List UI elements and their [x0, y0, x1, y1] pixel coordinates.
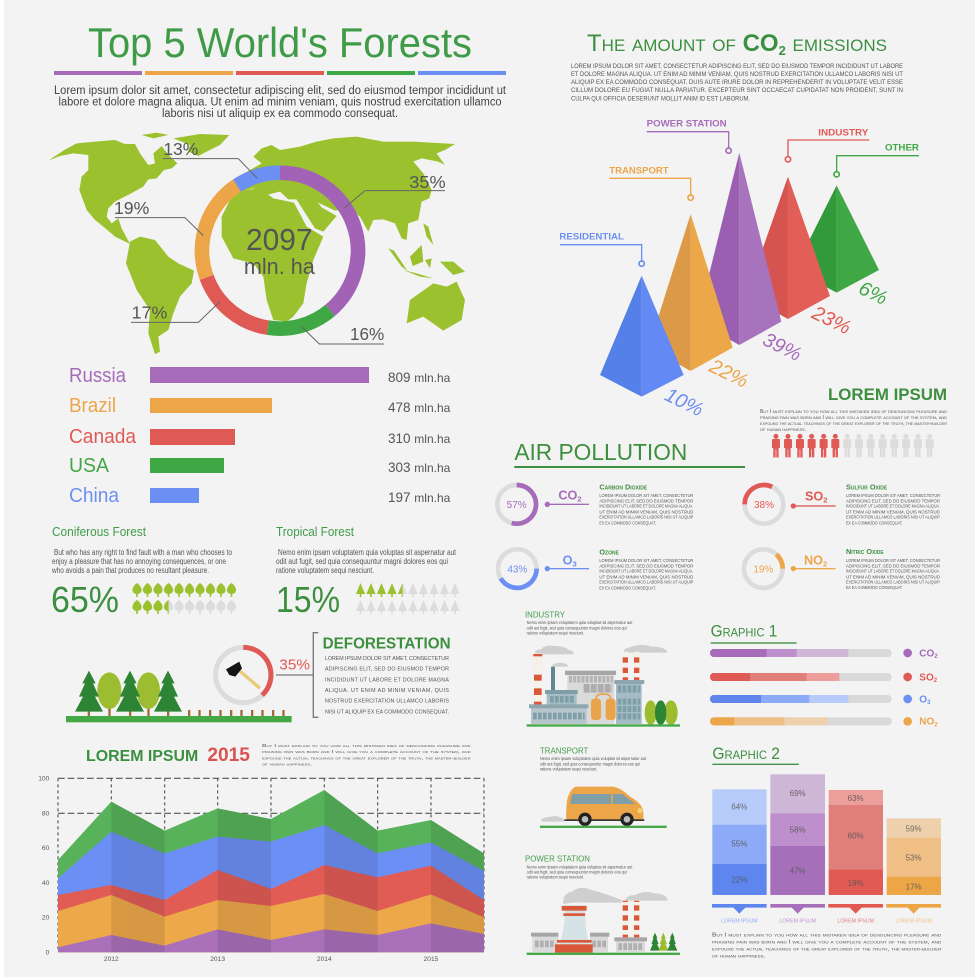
- text: ozone: LOREM IPSUM DOLOR SIT AMET, CONSECTETUR: [599, 558, 694, 564]
- text: sulfur oxide: [846, 482, 940, 527]
- text: ozone: ADIPISCING ELIT, SED DO EIUSMOD TEMPOR: [599, 563, 694, 569]
- gauge: NO2: [744, 549, 836, 588]
- legend: CO: [919, 648, 934, 659]
- CO2 intro text: [571, 64, 903, 102]
- column values: 58%: [790, 825, 806, 834]
- power station heading and text: odit aut fugit, sed quia consequuntur magni dolores eos qui: [527, 870, 627, 876]
- bar chart: top 5 countries: [69, 365, 451, 507]
- panel: tropical forest: [276, 525, 460, 620]
- world map with donut chart: 13%: [163, 139, 198, 159]
- panel: coniferous forest: But who has any right to find fault with a man who chooses to: [54, 548, 233, 557]
- connector and bracket: [276, 633, 318, 717]
- icon: conifer pictogram row: [356, 583, 460, 614]
- panel: tropical forest: Tropical Forest: [276, 525, 354, 539]
- axis labels: 2013: [210, 956, 225, 963]
- column captions: LOREM IPSUM: [721, 918, 758, 924]
- callout: power station: [647, 119, 731, 153]
- icon: tree pictogram row: [132, 583, 236, 614]
- bar chart: top 5 countries: Brazil: [69, 395, 116, 417]
- text: carbon dioxide: Carbon Dioxide: [599, 482, 648, 491]
- text: nitric oxide: Nitric Oxide: [846, 547, 884, 556]
- graphic 2 text: But I must explain to you how all this mistaken idea of denouncing pleasure and: [712, 933, 941, 939]
- bar chart: top 5 countries: 197 mln.ha: [388, 490, 451, 505]
- callout: power station: POWER STATION: [647, 119, 727, 129]
- text: ozone: [599, 548, 694, 592]
- text: nitric oxide: UT ENIM AD MINIM VENIAM, QUIS NOSTRUD: [846, 574, 940, 580]
- world map with donut chart: 17%: [132, 302, 167, 322]
- industry heading and text: ratione voluptatem sequi nesciunt.: [527, 631, 584, 637]
- legend: NO: [919, 717, 934, 728]
- title: Top 5 World's Forests: [88, 19, 472, 66]
- pyramid: power station: [697, 153, 781, 345]
- panel: area chart 2015: [38, 743, 484, 963]
- CO2 intro text: ET DOLORE MAGNA ALIQUA. UT ENIM AD MINIM VENIAM, QUIS NOSTRUD EXERCITATION ULLAMCO LABORIS NISI UT: [571, 72, 903, 78]
- panel: lorem ipsum people: expound the actual teachings of the great explorer of the truth, the master-builder: [760, 421, 947, 427]
- deforestation text: NISI UT ALIQUIP EX EA COMMODO CONSEQUAT.: [325, 709, 449, 715]
- column captions: [721, 918, 932, 924]
- column values: 60%: [848, 832, 864, 841]
- pyramid: residential: [600, 276, 684, 397]
- column captions: LOREM IPSUM: [837, 918, 874, 924]
- panel: graphic 2: [712, 744, 941, 960]
- transport heading and text: [540, 745, 647, 773]
- gauge: O3: [498, 549, 589, 588]
- text: ozone: Ozone: [599, 548, 620, 557]
- pyramid: industry: [746, 177, 830, 319]
- deforestation text: LOREM IPSUM DOLOR SIT AMET, CONSECTETUR: [325, 656, 449, 662]
- tree stumps: [188, 710, 285, 716]
- stacked area layers: [58, 790, 484, 952]
- panel: tropical forest: odit aut fugit, sed quia consequuntur magni dolores eos qui: [276, 557, 448, 566]
- text: ozone: UT ENIM AD MINIM VENIAM, QUIS NOSTRUD: [599, 574, 694, 580]
- column values: 47%: [790, 867, 806, 876]
- heading: CO2 emissions: 2: [779, 43, 786, 58]
- donut centre value: 2097: [246, 223, 313, 257]
- world map with donut chart: 35%: [409, 172, 446, 192]
- deforestation text: NOSTRUD EXERCITATION ULLAMCO LABORIS: [325, 699, 449, 705]
- text: carbon dioxide: INCIDIDUNT UT LABORE ET DOLORE MAGNA ALIQUA.: [599, 504, 693, 510]
- donut centre value: mln. ha: [244, 254, 316, 279]
- deforestation text: ALIQUA. UT ENIM AD MINIM VENIAM, QUIS: [325, 688, 449, 694]
- industry heading and text: Nemo enim ipsam voluptatem quia voluptas sit aspernatur aut: [527, 620, 633, 626]
- power station heading and text: POWER STATION: [525, 853, 590, 863]
- transport heading and text: odit aut fugit, sed quia consequuntur magni dolores eos qui: [540, 761, 640, 767]
- callout: other: OTHER: [885, 143, 920, 153]
- deforestation heading: DEFORESTATION: [323, 635, 451, 652]
- text: nitric oxide: EXERCITATION ULLAMCO LABORIS NISI UT ALIQUIP: [846, 580, 940, 586]
- axis labels: 100: [38, 776, 50, 783]
- text: nitric oxide: EX EA COMMODO CONSEQUAT.: [846, 585, 903, 591]
- gauge: SO2: 2: [823, 496, 828, 505]
- panel: pollution sources: [525, 609, 680, 955]
- text: carbon dioxide: UT ENIM AD MINIM VENIAM, QUIS NOSTRUD: [599, 509, 694, 515]
- donut centre value: [244, 223, 316, 279]
- pyramid percentages: 39%: [759, 329, 805, 366]
- intro text: Lorem ipsum dolor sit amet, consectetur adipiscing elit, sed do eiusmod tempor incididunt ut: [54, 85, 507, 97]
- panel: tropical forest: 15%: [276, 579, 340, 620]
- illustration: power station: [527, 888, 680, 955]
- panel: tropical forest: Nemo enim ipsam voluptatem quia voluptas sit aspernatur aut: [278, 548, 457, 557]
- intro text: laboris nisi ut aliquip ex ea commodo consequat.: [162, 108, 398, 120]
- axis labels: 0: [46, 950, 50, 957]
- panel: deforestation: [66, 633, 451, 722]
- text: sulfur oxide: LOREM IPSUM DOLOR SIT AMET, CONSECTETUR: [846, 493, 940, 499]
- text: ozone: EXERCITATION ULLAMCO LABORIS NISI UT ALIQUIP: [599, 580, 693, 586]
- panel: coniferous forest: [51, 525, 236, 620]
- deforestation text: [325, 656, 449, 715]
- CO2 intro text: CULPA QUI OFFICIA DESERUNT MOLLIT ANIM ID EST LABORUM.: [571, 96, 750, 102]
- chart description: expound the actual teachings of the great explorer of the truth, the master-builder: [262, 755, 472, 761]
- text: carbon dioxide: EXERCITATION ULLAMCO LABORIS NISI UT ALIQUIP: [599, 515, 693, 521]
- bar chart: top 5 countries: 478 mln.ha: [388, 400, 451, 415]
- donut leader lines and percentages: [115, 159, 445, 344]
- transport heading and text: ratione voluptatem sequi nesciunt.: [540, 767, 597, 773]
- legend: 2: [934, 722, 938, 728]
- column values: 19%: [848, 879, 864, 888]
- text: nitric oxide: ADIPISCING ELIT, SED DO EIUSMOD TEMPOR: [846, 563, 940, 569]
- panel: coniferous forest: Coniferous Forest: [52, 525, 146, 539]
- gauge with axe icon: [216, 647, 271, 703]
- bar chart: top 5 countries: 310 mln.ha: [388, 431, 451, 446]
- illustration: van: [540, 787, 667, 828]
- panel: lorem ipsum people: praising pain was born and I will give you a complete account of the system, and: [760, 415, 947, 421]
- column captions: LOREM IPSUM: [779, 918, 816, 924]
- text: sulfur oxide: Sulfur Oxide: [846, 482, 888, 491]
- title colour rule: [54, 71, 506, 75]
- column values: 64%: [731, 803, 747, 812]
- industry heading and text: odit aut fugit, sed quia consequuntur magni dolores eos qui: [527, 625, 627, 631]
- graphic 1 heading: Graphic 1: [711, 622, 777, 641]
- axis labels: 2012: [104, 956, 119, 963]
- pyramid percentages: 23%: [808, 302, 854, 339]
- chart description: praising pain was born and I will give you a complete account of the system, and: [262, 749, 472, 755]
- panel: graphic 1: [710, 622, 938, 728]
- callout: industry: [785, 127, 869, 162]
- column captions: LOREM IPSUM: [895, 918, 932, 924]
- column values: 53%: [906, 854, 922, 863]
- legend: [903, 648, 938, 728]
- legend: O: [919, 694, 927, 705]
- text: sulfur oxide: EXERCITATION ULLAMCO LABORIS NISI UT ALIQUIP: [846, 515, 940, 521]
- column values: 59%: [906, 825, 922, 834]
- world map with donut chart: 19%: [114, 198, 149, 218]
- callout: other: [834, 143, 920, 177]
- gauge: O3: O: [563, 553, 573, 567]
- chart heading: LOREM IPSUM: [86, 748, 198, 765]
- gauge: CO2: 2: [577, 494, 582, 503]
- pyramid percentages: [661, 277, 891, 421]
- chart description: But I must explain to you how all this mistaken idea of denouncing pleasure and: [262, 743, 472, 749]
- trees: [75, 671, 182, 716]
- air pollution heading: AIR POLLUTION: [514, 439, 687, 465]
- panel: coniferous forest: 65%: [51, 579, 119, 620]
- column values: 55%: [731, 839, 747, 848]
- text: sulfur oxide: UT ENIM AD MINIM VENIAM, QUIS NOSTRUD: [846, 509, 940, 515]
- world map with donut chart: 16%: [350, 324, 384, 344]
- pyramid percentages: 10%: [661, 384, 707, 421]
- pyramid chart: [559, 119, 920, 421]
- progress bars: [710, 649, 892, 725]
- chart description: of human happiness.: [262, 762, 312, 768]
- bar chart: top 5 countries: Russia: [69, 365, 127, 387]
- callout: transport: [609, 165, 693, 200]
- gauge: NO2: 19%: [753, 564, 773, 575]
- map: continents: [48, 133, 465, 354]
- icon: people pictogram: [772, 434, 934, 457]
- axis labels: 20: [42, 915, 50, 922]
- panel: lorem ipsum people: LOREM IPSUM: [828, 386, 947, 404]
- panel: lorem ipsum people: [760, 386, 947, 457]
- deforestation text: ADIPISCING ELIT, SED DO EIUSMOD TEMPOR: [325, 667, 449, 673]
- panel: lorem ipsum people: But I must explain to you how all this mistaken idea of denouncing pleasure and: [760, 409, 947, 415]
- legend: 2: [934, 654, 938, 660]
- panel: coniferous forest: enjoy a pleasure that has no annoying consequences, or one: [52, 557, 226, 566]
- transport heading and text: Nemo enim ipsam voluptatem quia voluptas sit aspernatur aut: [540, 756, 647, 762]
- bar chart: top 5 countries: Canada: [69, 426, 137, 448]
- heading: CO2 emissions: emissions: [786, 30, 887, 57]
- chart description: [262, 743, 472, 768]
- axis labels: 2014: [317, 956, 332, 963]
- callout: residential: RESIDENTIAL: [559, 231, 625, 241]
- legend: 2: [934, 678, 938, 684]
- gauge: CO2: [497, 485, 589, 524]
- donut ring segments: [202, 173, 358, 329]
- callout: industry: INDUSTRY: [818, 127, 868, 137]
- bar chart: top 5 countries: 303 mln.ha: [388, 460, 451, 475]
- text: carbon dioxide: ADIPISCING ELIT, SED DO EIUSMOD TEMPOR: [599, 498, 694, 504]
- gauge: CO2: 57%: [507, 500, 527, 511]
- heading: CO2 emissions: The amount of CO: [587, 30, 779, 57]
- gauge: SO2: [745, 485, 836, 524]
- heading underline: [514, 466, 745, 468]
- text: carbon dioxide: EX EA COMMODO CONSEQUAT.: [599, 521, 656, 527]
- bar chart: top 5 countries: 809 mln.ha: [388, 370, 451, 385]
- world map with donut chart: [48, 133, 465, 354]
- callout: transport: TRANSPORT: [609, 165, 669, 175]
- callout: residential: [559, 231, 644, 266]
- ground: [66, 716, 292, 722]
- air pollution panel: [497, 439, 940, 592]
- industry heading and text: INDUSTRY: [525, 609, 565, 619]
- deforestation percentage: 35%: [279, 656, 310, 673]
- intro text: [54, 85, 507, 120]
- column values: 63%: [848, 794, 864, 803]
- gauge: SO2: SO: [805, 490, 823, 504]
- axis labels: 60: [42, 845, 50, 852]
- illustration: factory: [527, 645, 680, 727]
- axis labels: 80: [42, 811, 50, 818]
- panel: tropical forest: ratione voluptatem sequi nesciunt.: [276, 566, 374, 575]
- pyramid: transport: [649, 214, 733, 371]
- bar chart: top 5 countries: China: [69, 485, 120, 507]
- column values: [731, 789, 922, 891]
- legend: SO: [919, 672, 934, 683]
- graphic 2 text: praising pain was born and I will give you a complete account of the system, and: [712, 940, 941, 946]
- text: carbon dioxide: [599, 482, 694, 527]
- power station heading and text: ratione voluptatem sequi nesciunt.: [527, 875, 584, 881]
- text: sulfur oxide: ADIPISCING ELIT, SED DO EIUSMOD TEMPOR: [846, 498, 940, 504]
- gauge: O3: 43%: [507, 564, 527, 575]
- graphic 2 text: expound the actual teachings of the great explorer of the truth, the master-builder: [712, 946, 941, 952]
- text: sulfur oxide: EX EA COMMODO CONSEQUAT.: [846, 521, 903, 527]
- pyramid percentages: 6%: [855, 277, 891, 310]
- text: ozone: EX EA COMMODO CONSEQUAT.: [599, 586, 656, 592]
- CO2 intro text: LOREM IPSUM DOLOR SIT AMET, CONSECTETUR ADIPISCING ELIT, SED DO EIUSMOD TEMPOR INCIDIDUNT UT LABORE: [571, 64, 903, 70]
- panel: lorem ipsum people: of human happiness.: [760, 427, 806, 433]
- gauge: SO2: 38%: [754, 500, 774, 511]
- chart year: 2015: [207, 745, 250, 766]
- pyramid percentages: 22%: [705, 355, 751, 393]
- CO2 intro text: CILLUM DOLORE EU FUGIAT NULLA PARIATUR. EXCEPTEUR SINT OCCAECAT CUPIDATAT NON PROIDENT, SUNT IN: [571, 88, 903, 94]
- pyramid: other: [794, 185, 879, 293]
- graphic 2 heading: Graphic 2: [712, 744, 780, 763]
- graphic 2 text: [712, 933, 941, 960]
- intro text: labore et dolore magna aliqua. Ut enim ad minim veniam, quis nostrud exercitation ullamco: [58, 96, 502, 108]
- column values: 22%: [731, 875, 747, 884]
- deforestation text: INCIDIDUNT UT LABORE ET DOLORE MAGNA: [325, 677, 449, 683]
- gauge: CO2: CO: [558, 488, 577, 502]
- text: ozone: INCIDIDUNT UT LABORE ET DOLORE MAGNA ALIQUA.: [599, 569, 693, 575]
- industry heading and text: [525, 609, 633, 637]
- text: nitric oxide: LOREM IPSUM DOLOR SIT AMET, CONSECTETUR: [846, 558, 940, 564]
- legend: 3: [927, 700, 931, 706]
- text: nitric oxide: INCIDIDUNT UT LABORE ET DOLORE MAGNA ALIQUA.: [846, 569, 940, 575]
- panel: coniferous forest: who avoids a pain that produces no resultant pleasure.: [51, 566, 209, 575]
- gauge: NO2: 2: [823, 559, 827, 568]
- stacked columns: [712, 774, 941, 895]
- column values: 17%: [906, 882, 922, 891]
- text: nitric oxide: [846, 547, 940, 591]
- text: carbon dioxide: LOREM IPSUM DOLOR SIT AMET, CONSECTETUR: [599, 493, 694, 499]
- axis labels: [38, 776, 439, 963]
- column tabs: [712, 904, 941, 914]
- axis labels: 2015: [424, 956, 439, 963]
- graphic 2 text: of human happiness.: [712, 954, 766, 960]
- axis labels: 40: [42, 880, 50, 887]
- grid: [58, 778, 484, 813]
- power station heading and text: [525, 853, 633, 881]
- gauge: NO2: NO: [804, 553, 823, 567]
- CO2 intro text: ALIQUIP EX EA COMMODO CONSEQUAT. DUIS AUTE IRURE DOLOR IN REPREHENDERIT IN VOLUPTATE VELIT ESSE: [571, 80, 903, 86]
- bar chart: top 5 countries: USA: [69, 455, 110, 477]
- power station heading and text: Nemo enim ipsam voluptatem quia voluptas sit aspernatur aut: [527, 864, 633, 870]
- column values: 69%: [790, 789, 806, 798]
- transport heading and text: TRANSPORT: [540, 745, 589, 755]
- gauge: O3: 3: [573, 559, 577, 568]
- text: sulfur oxide: INCIDIDUNT UT LABORE ET DOLORE MAGNA ALIQUA.: [846, 504, 940, 510]
